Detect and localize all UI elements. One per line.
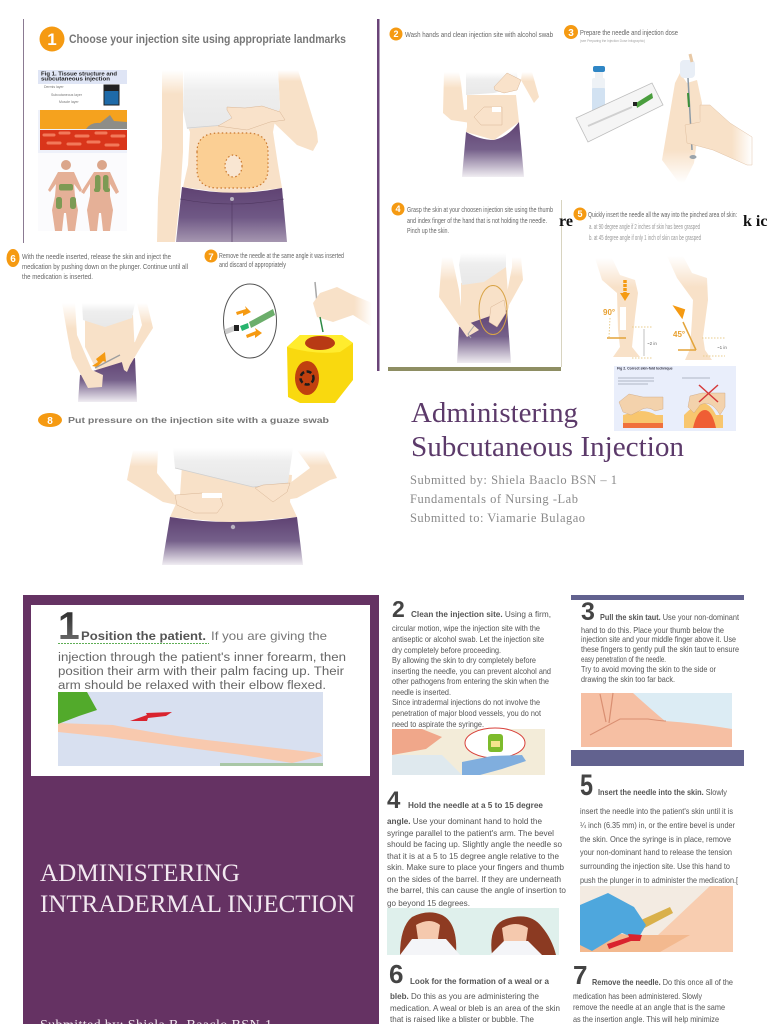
step 7: remove the needle: Remove the needle. Do this once all of the [592, 977, 733, 987]
illustration: needle insertion into arm [580, 886, 733, 952]
step 4: hold the needle: angle. Use your dominant hand to hold the [387, 816, 542, 826]
card: step 1 position the patient: arm should be relaxed with their elbow flexed. [58, 680, 326, 692]
inset: correct and incorrect skin pinch [614, 366, 736, 431]
figure: back body [81, 160, 119, 231]
inset: correct and incorrect skin pinch: Fig 2. Correct skin-fold technique [617, 366, 673, 370]
illustration: pulling skin taut [581, 693, 732, 747]
step 7: remove the needle [573, 960, 733, 1024]
figure: tissue structure and body sites: Fig 1. Tissue structure and [41, 72, 117, 78]
step 4: hold the needle: go beyond 15 degrees. [387, 898, 470, 908]
step 5: insert the needle [580, 769, 739, 952]
title: subcutaneous [411, 397, 684, 463]
step 6: look for a weal: that is raised like a blister or bubble. The [390, 1014, 534, 1024]
step 7: remove the needle: medication has been administered. Slowly [573, 991, 703, 1001]
step 4: hold the needle: Hold the needle at a 5 to 15 degree [408, 800, 543, 810]
card: step 1 position the patient [31, 605, 370, 776]
submission details: Fundamentals of Nursing -Lab [410, 492, 578, 506]
submission details [410, 473, 617, 525]
step 5: insert the needle: surrounding the injection site. Use this hand to [580, 861, 730, 871]
step 6 heading: medication by pushing down on the plunger. Continue until all [22, 262, 188, 271]
illustration: injecting medication [62, 303, 153, 402]
step 3 heading: Prepare the needle and injection dose [580, 28, 678, 37]
illustration: 45 degree insertion: ~1 in [717, 345, 727, 350]
step 7 heading: and discard of appropriately [219, 260, 286, 269]
step 2: clean the injection site: penetration of major blood vessels, you do not [392, 708, 542, 718]
step 2: clean the injection site: Since intradermal injections do not involve the [392, 697, 540, 707]
illustration: vial [592, 66, 605, 111]
figure: front body [48, 160, 82, 231]
step 7: remove the needle: remove the needle at an angle that is the same [573, 1002, 725, 1012]
step 2: clean the injection site: By allowing the skin to dry completely before [392, 655, 536, 665]
illustration: 45 degree insertion: 45° [673, 330, 685, 339]
step 3 heading: 3 [568, 28, 574, 39]
step 3: pull the skin taut: hand to do this. Place your thumb below the [581, 625, 724, 635]
step 3: pull the skin taut: Try to avoid moving the skin to the side or [581, 664, 716, 674]
submission details: Submitted to: Viamarie Bulagao [410, 511, 585, 525]
step 6 heading: the medication is inserted. [22, 272, 93, 281]
illustration: syringe package [576, 83, 663, 142]
stray clipped text: k ic [743, 213, 767, 230]
step 8 heading [38, 413, 329, 427]
card: step 1 position the patient: injection through the patient's inner forearm, then [58, 652, 346, 664]
step 6: look for a weal: Look for the formation of a weal or a [410, 976, 549, 986]
step 2: clean the injection site: dry completely before proceeding. [392, 645, 501, 655]
step 2: clean the injection site [392, 596, 551, 775]
illustration: torso with injection landmarks [157, 70, 318, 242]
stray clipped text: re [559, 213, 573, 230]
step 7 heading: 7 [208, 252, 214, 263]
step 3: pull the skin taut: 3 [581, 598, 595, 626]
step 6 heading [6, 249, 188, 281]
step 5: insert the needle: 5 [580, 769, 593, 802]
rule: right of subcutaneous panel [377, 19, 380, 371]
illustration: 90 degree insertion [595, 258, 657, 358]
step 3: pull the skin taut [571, 595, 744, 766]
illustration: pressure with gauze [127, 448, 337, 565]
step 5: insert the needle: insert the needle into the patient's skin until it is [580, 806, 733, 816]
illustration: hands drawing dose [662, 54, 752, 183]
step 2: clean the injection site: inserting the needle, you can prevent alcohol and [392, 666, 551, 676]
step 6: look for a weal: 6 [389, 959, 403, 989]
step 2: clean the injection site: circular motion, wipe the injection site with the [392, 623, 540, 633]
rule: left of step 1 panel [23, 19, 24, 243]
step 4: hold the needle: should be facing up. Slightly angle the needle so [387, 839, 562, 849]
step 3: pull the skin taut: these fingers to gently pull the skin taut to ensure [581, 644, 739, 654]
step 7: remove the needle: as the insertion angle. This will help minimize [573, 1014, 719, 1024]
step 5: insert the needle: the skin. Once the syringe is in place, remove [580, 834, 731, 844]
title: subcutaneous: Administering [411, 397, 578, 429]
panel: step 4: and index finger of the hand that is not holding the needle. [407, 216, 547, 225]
illustration: 90 degree insertion: ~2 in [647, 341, 657, 346]
figure: tissue structure and body sites: Dermis layer [44, 85, 64, 89]
stray clipped text [559, 213, 767, 230]
panel: intradermal cover [23, 595, 379, 1024]
card: step 1 position the patient: position their arm with their palm facing up. Their [58, 666, 344, 678]
step 2: clean the injection site: other pathogens from entering the skin when the [392, 676, 549, 686]
step 4: hold the needle: on the sides of the barrel. If they are underneath [387, 874, 561, 884]
step 5: insert the needle: push the plunger in to administer the medication.[ [580, 875, 739, 885]
step 7 heading [204, 250, 344, 269]
panel: intradermal cover: INTRADERMAL INJECTION [40, 891, 355, 918]
step 3 heading: (see Preparing the Injection Dose Infographic) [580, 39, 645, 43]
step 5: insert the needle: Insert the needle into the skin. Slowly [598, 787, 728, 797]
panel: step 4: Grasp the skin at your choosen injection site using the thumb [407, 205, 553, 214]
panel: step 4: Pinch up the skin. [407, 226, 449, 235]
step 1 heading [40, 26, 346, 52]
submission details: Submitted by: Shiela Baaclo BSN – 1 [410, 473, 617, 487]
illustration: antiseptic bottle and gloved hand [392, 728, 545, 775]
step 7 heading: Remove the needle at the same angle it was inserted [219, 251, 344, 260]
card: step 1 position the patient: If you are giving the [211, 629, 327, 643]
figure: tissue structure and body sites: Muscle layer [59, 100, 79, 104]
title: subcutaneous: Subcutaneous Injection [411, 431, 684, 463]
step 6: look for a weal: bleb. Do this as you are administering the [390, 991, 539, 1001]
step 4: hold the needle: that it is at a 5 to 15 degree angle relative to the [387, 851, 559, 861]
illustration: 45 degree insertion [667, 256, 727, 360]
illustration: cleaning with swab [443, 72, 539, 177]
step 8 heading: Put pressure on the injection site with a guaze swab [68, 416, 329, 425]
illustration: needle magnifier circle [224, 284, 276, 358]
icon: yellow sharps container [287, 335, 353, 403]
figure: tissue structure and body sites: subcutaneous injection [41, 76, 110, 82]
step 2: clean the injection site: need to aspirate the syringe. [392, 719, 484, 729]
step 4: hold the needle: skin. Make sure to place your fingers and thumb [387, 862, 564, 872]
step 3: pull the skin taut: injection site and your middle finger above it. Use [581, 634, 736, 644]
step 4: hold the needle: the barrel, this can cause the angle of insertion to [387, 885, 566, 895]
panel: intradermal cover: ADMINISTERING [40, 860, 240, 887]
step 2: clean the injection site: Clean the injection site. Using a firm, [411, 609, 551, 619]
step 6 heading: 6 [10, 254, 16, 265]
step 2 heading: Wash hands and clean injection site with alcohol swab [405, 30, 553, 39]
illustration: hand dropping needle [313, 282, 372, 332]
panel: step 4: 4 [395, 204, 401, 214]
step 6: look for a weal [389, 959, 560, 1024]
step 4: hold the needle: 4 [387, 787, 401, 814]
step 2: clean the injection site: needle is inserted. [392, 687, 451, 697]
step 6 heading: With the needle inserted, release the skin and inject the [22, 252, 171, 261]
step 7: remove the needle: 7 [573, 960, 587, 990]
illustration: forearm with arrow [58, 692, 323, 766]
step 2: clean the injection site: 2 [392, 596, 405, 622]
step 4: hold the needle: syringe parallel to the patient's arm. The bevel [387, 828, 554, 838]
card: step 1 position the patient: Position the patient. [81, 629, 206, 643]
step 3: pull the skin taut: easy penetration of the needle. [581, 654, 666, 664]
illustration: 90 degree insertion: 90° [603, 308, 615, 317]
illustration: nurse and patient [387, 908, 559, 955]
step 5: insert the needle: ¼ inch (6.35 mm) in, or the entire bevel is under [580, 820, 735, 830]
step 2 heading [390, 28, 553, 40]
figure: tissue structure and body sites [38, 70, 127, 231]
step 5: insert the needle: your non-dominant hand to release the tension [580, 847, 732, 857]
figure: tissue structure and body sites: Subcutaneous layer [51, 93, 83, 97]
step 6: look for a weal: medication. A weal or bleb is an area of the skin [390, 1003, 560, 1013]
illustration: pinching the skin [439, 253, 523, 363]
step 8 heading: 8 [47, 416, 53, 427]
step 5 heading: 5 [577, 209, 583, 219]
step 3 heading [564, 25, 678, 43]
step 5 heading [574, 208, 737, 242]
step 1 heading: Choose your injection site using appropriate landmarks [69, 34, 346, 46]
step 1 heading: 1 [47, 30, 57, 49]
step 2: clean the injection site: antiseptic or alcohol swab. Let the injection site [392, 634, 544, 644]
step 2 heading: 2 [393, 29, 399, 39]
card: step 1 position the patient: 1 [58, 605, 80, 648]
step 3: pull the skin taut: Pull the skin taut. Use your non-dominant [600, 612, 740, 622]
panel: step 4 [388, 200, 562, 371]
step 4: hold the needle [387, 787, 566, 955]
step 3: pull the skin taut: drawing the skin too far back. [581, 674, 675, 684]
